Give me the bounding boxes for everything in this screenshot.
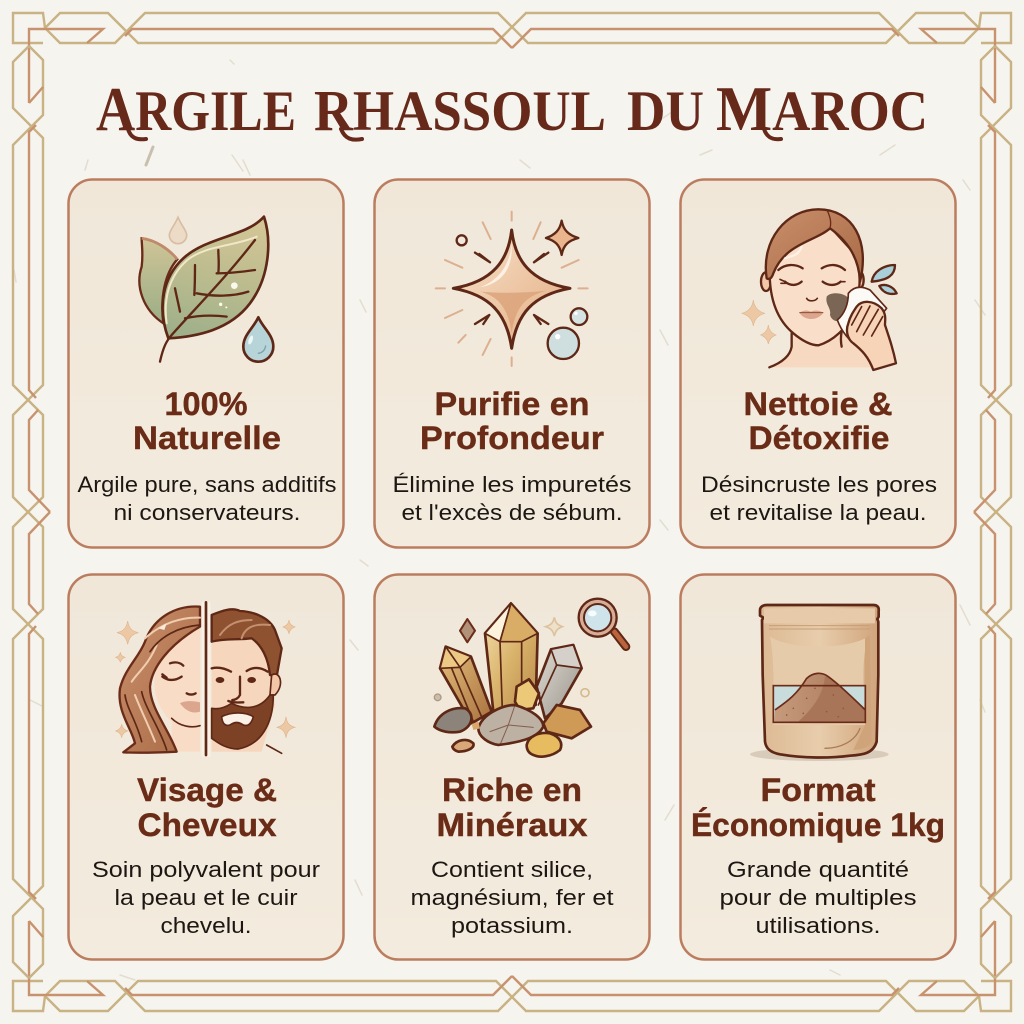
- description: [701, 472, 937, 525]
- heading: Cheveux: [138, 807, 277, 843]
- description: [410, 857, 614, 938]
- description: potassium.: [451, 913, 573, 938]
- panel: visage et cheveux: [68, 574, 344, 960]
- heading: [744, 386, 892, 456]
- description: chevelu.: [160, 913, 252, 938]
- heading: Minéraux: [436, 807, 588, 843]
- heading: Naturelle: [133, 420, 281, 456]
- heading: Nettoie &: [744, 386, 892, 422]
- panel: format économique: [680, 574, 956, 960]
- description: [92, 857, 321, 938]
- description: pour de multiples: [720, 885, 916, 910]
- icon: face being cleansed: [742, 209, 897, 370]
- heading: Profondeur: [420, 420, 604, 456]
- description: Contient silice,: [431, 857, 593, 882]
- heading: Purifie en: [434, 386, 590, 422]
- description: Grande quantité: [727, 857, 909, 882]
- heading: [133, 386, 281, 456]
- description: [720, 857, 916, 938]
- icon: kraft pouch with clay powder: [750, 605, 889, 761]
- description: ni conservateurs.: [114, 500, 300, 525]
- description: utilisations.: [756, 913, 880, 938]
- heading: Économique 1kg: [691, 807, 945, 843]
- title: ARGILE: [96, 76, 296, 144]
- heading: Détoxifie: [748, 420, 890, 456]
- description: Soin polyvalent pour: [92, 857, 321, 882]
- description: Élimine les impuretés: [392, 472, 632, 497]
- panel: purifie en profondeur: [374, 180, 650, 548]
- heading: [691, 772, 945, 843]
- title: DU: [627, 80, 704, 143]
- description: Désincruste les pores: [701, 472, 937, 497]
- description: [392, 472, 632, 525]
- icon: mineral crystals and magnifier: [434, 599, 626, 757]
- panel: 100% naturelle: [68, 180, 344, 548]
- panel: nettoie et détoxifie: [680, 180, 956, 548]
- description: la peau et le cuir: [114, 885, 298, 910]
- description: Argile pure, sans additifs: [78, 472, 336, 497]
- heading: [420, 386, 604, 456]
- icon: woman and man split portrait: [116, 602, 295, 757]
- description: et revitalise la peau.: [710, 500, 926, 525]
- title: MAROC: [716, 73, 928, 144]
- description: magnésium, fer et: [410, 885, 614, 910]
- heading: [436, 772, 588, 843]
- heading: Format: [760, 772, 876, 808]
- heading: Riche en: [442, 772, 582, 808]
- title: [96, 73, 928, 144]
- heading: [137, 772, 277, 843]
- icon: sparkle with bubbles: [436, 212, 588, 366]
- panel: riche en minéraux: [374, 574, 650, 960]
- heading: Visage &: [137, 772, 277, 808]
- heading: 100%: [164, 386, 248, 422]
- icon: leaf with drops: [139, 217, 273, 362]
- description: [78, 472, 336, 525]
- title: RHASSOUL: [314, 78, 606, 143]
- description: et l'excès de sébum.: [402, 500, 622, 525]
